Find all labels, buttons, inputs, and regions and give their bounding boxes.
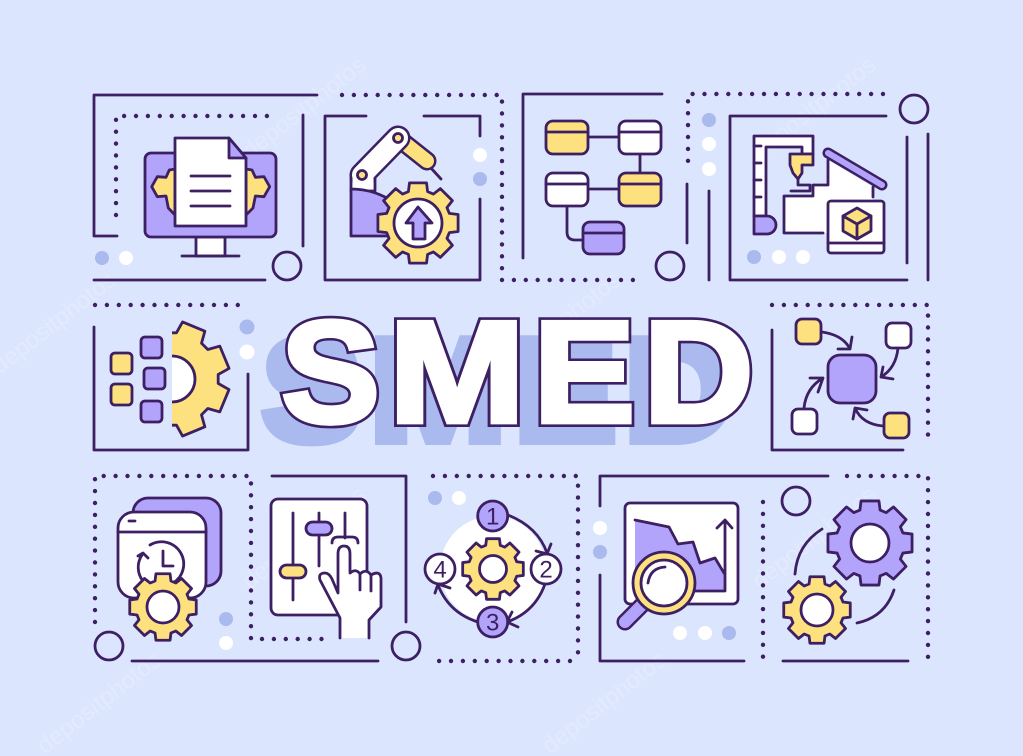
icon: gear	[463, 539, 523, 599]
watermarks: depositphotos	[747, 51, 881, 165]
icon: printer frame	[754, 136, 813, 234]
icon: document	[175, 138, 246, 226]
title: SMED	[281, 290, 753, 454]
title: SMED: M	[389, 291, 525, 453]
title: SMED shadow	[262, 308, 734, 472]
panel: four step cycle	[425, 476, 578, 661]
sliders	[280, 513, 358, 600]
title: SMED: E	[534, 290, 635, 453]
icon: house	[784, 153, 882, 233]
step 1: 1	[486, 504, 499, 530]
watermarks: depositphotos	[237, 51, 371, 165]
icon: monitor	[145, 153, 276, 256]
step 3	[478, 607, 508, 637]
title: SMED shadow: D	[624, 308, 734, 471]
watermarks: depositphotos	[237, 481, 371, 595]
icon: gear	[130, 574, 196, 640]
icon: pointing hand	[320, 546, 381, 638]
icon: yellow gear	[784, 577, 850, 643]
panel: chart analysis	[593, 476, 828, 661]
arrows	[435, 515, 551, 627]
chart area	[635, 520, 732, 591]
arrows	[804, 332, 898, 426]
icon: upload gear	[378, 183, 458, 263]
step 1	[478, 501, 508, 531]
box: white middle left	[546, 173, 588, 206]
title: SMED shadow: E	[514, 308, 616, 471]
panel: document on monitor	[94, 95, 317, 280]
icon: gear behind document	[152, 169, 270, 215]
panel: robot arm with gear	[325, 95, 502, 280]
panel: flowchart	[502, 94, 709, 280]
title: SMED: E	[534, 290, 635, 453]
step 3: 3	[486, 610, 499, 636]
panel: clock window and gear	[95, 476, 378, 661]
title: SMED: S	[281, 291, 380, 454]
watermarks: depositphotos	[492, 266, 626, 380]
box: yellow top left	[546, 121, 588, 154]
title: SMED shadow: S	[262, 309, 361, 472]
icon: cube card	[828, 201, 884, 253]
step 2	[531, 554, 561, 584]
box: white top right	[619, 121, 661, 154]
icon: half gear	[172, 320, 230, 438]
panel: 3D printing house	[688, 94, 928, 280]
box: yellow middle right	[619, 173, 661, 206]
step 2: 2	[539, 556, 553, 584]
title: SMED: D	[644, 290, 753, 453]
icon: purple gear	[828, 501, 912, 585]
step 4: 4	[433, 556, 447, 584]
panel: two gears	[763, 476, 928, 661]
icon: magnifier	[625, 552, 695, 622]
panel: connected squares	[772, 305, 928, 450]
title: SMED: M	[389, 291, 525, 453]
icon: window	[118, 498, 221, 598]
panel: sliders with hand	[271, 476, 420, 660]
step 4	[425, 554, 455, 584]
title: SMED shadow: M	[370, 309, 506, 471]
panel: gear conversion	[94, 305, 254, 453]
watermarks: depositphotos	[747, 481, 881, 595]
icon: clock	[138, 542, 184, 583]
title: SMED: S	[281, 291, 380, 454]
icon: robot arm	[351, 134, 441, 236]
title: SMED: D	[644, 290, 753, 453]
box: purple bottom	[583, 222, 624, 254]
icon: small squares	[111, 337, 165, 422]
